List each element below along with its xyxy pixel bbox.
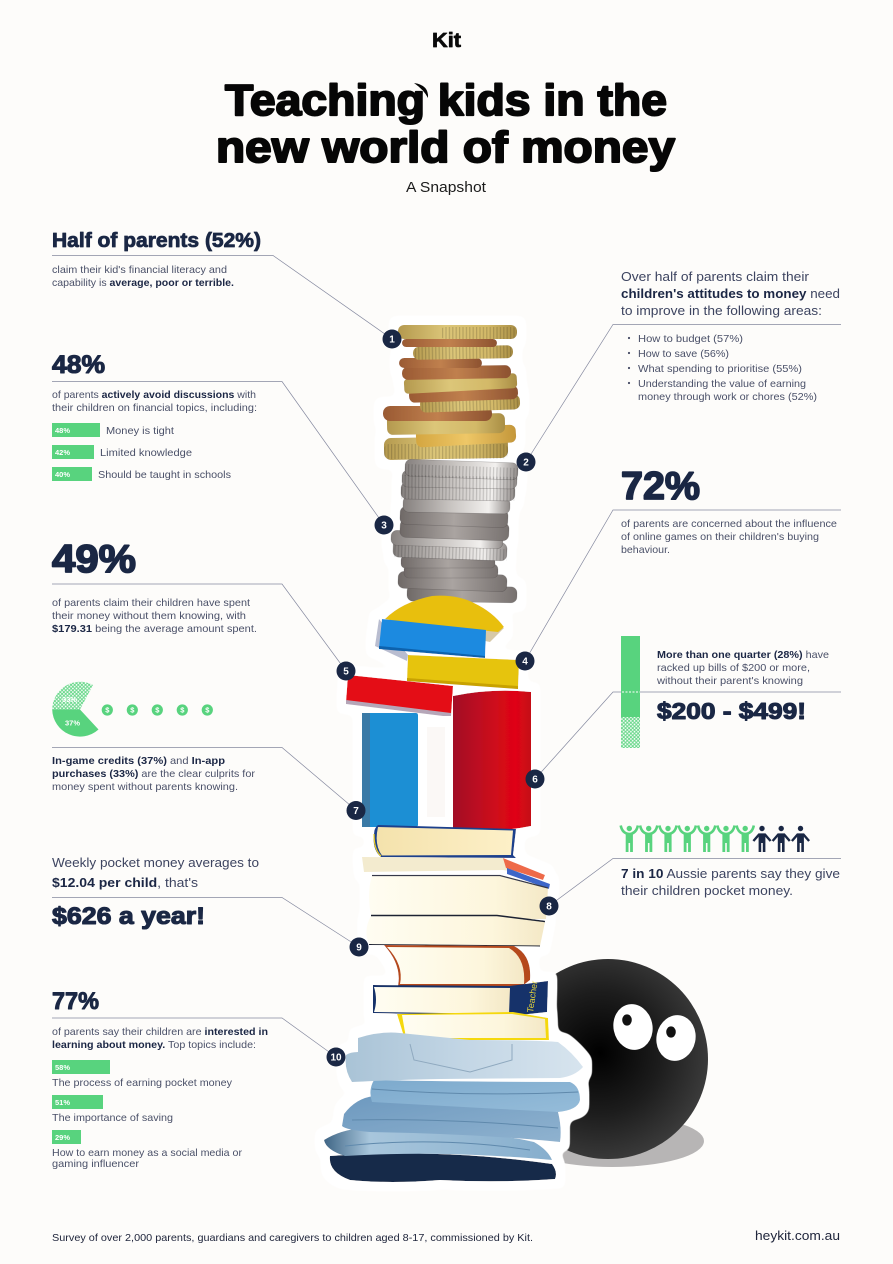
numbered markers: 7 xyxy=(353,806,359,817)
text block: capability is average, poor or terrible. xyxy=(52,277,234,289)
pie chart: in-game credits and in-app purchases: 37% xyxy=(65,718,80,728)
leader line 9 xyxy=(52,898,359,947)
panel: 48 percent avoid discussions xyxy=(52,351,384,525)
text block: racked up bills of $200 or more, xyxy=(657,662,810,674)
panel: culprits xyxy=(52,748,357,811)
bar chart: reasons: Should be taught in schools xyxy=(98,469,231,481)
panel: 49 percent spent without knowing xyxy=(52,538,346,671)
leader line 4 xyxy=(525,510,841,661)
stat: $626 a year: $626 a year! xyxy=(52,903,205,930)
text block xyxy=(52,597,257,635)
text block: their children on financial topics, including: xyxy=(52,402,257,414)
text block: without their parent's knowing xyxy=(656,675,803,687)
text block xyxy=(621,269,840,318)
text block: of parents claim their children have spent xyxy=(52,597,250,609)
panel: attitudes to money xyxy=(526,269,841,462)
bar chart: topics: 29% xyxy=(55,1133,70,1142)
text block: purchases (33%) are the clear culprits for xyxy=(52,768,256,780)
silver coin stack xyxy=(391,459,518,603)
bullet list: How to save (56%) xyxy=(638,348,729,360)
text block: of online games on their children's buying xyxy=(621,531,819,543)
bullet list: Understanding the value of earning xyxy=(638,378,806,390)
footer: website: heykit.com.au xyxy=(755,1228,840,1243)
text block: to improve in the following areas: xyxy=(621,303,822,318)
leader line 8 xyxy=(549,858,841,906)
text block: More than one quarter (28%) have xyxy=(657,649,829,661)
numbered markers: 6 xyxy=(532,774,538,786)
text block: $12.04 per child , that's xyxy=(52,875,199,890)
text block xyxy=(621,518,837,556)
bullet list: What spending to prioritise (55%) xyxy=(638,363,802,375)
pie chart: in-game credits and in-app purchases: 33% xyxy=(62,695,77,704)
numbered markers: 5 xyxy=(343,666,349,678)
panel: bills of $200 or more xyxy=(535,636,841,779)
text block: their money without them knowing, with xyxy=(52,610,246,622)
numbered markers: 10 xyxy=(330,1052,342,1064)
text block: children's attitudes to money need xyxy=(621,286,840,301)
text block: Weekly pocket money averages to xyxy=(52,855,259,870)
stat: 48%: 48% xyxy=(52,351,105,379)
panel: weekly pocket money xyxy=(52,855,359,947)
leader line 6 xyxy=(535,692,841,779)
bar chart: reasons: Limited knowledge xyxy=(100,447,192,459)
bar chart: topics: 51% xyxy=(55,1098,70,1107)
bar chart: topics: The importance of saving xyxy=(52,1112,173,1124)
stat: 72%: 72% xyxy=(621,465,700,508)
icons: dollar coins xyxy=(102,704,213,716)
bar chart: reasons: Money is tight xyxy=(106,425,174,437)
bar chart: reasons: 42% xyxy=(55,448,70,457)
leader line 10 xyxy=(52,1018,336,1057)
stat: 49%: 49% xyxy=(52,538,136,581)
panel: 72 percent online games xyxy=(525,465,841,661)
numbered markers xyxy=(326,330,558,1066)
heading: half of parents: Half of parents (52%) xyxy=(52,230,261,252)
text block: $179.31 being the average amount spent. xyxy=(52,623,257,635)
bar chart: topics xyxy=(52,1060,243,1170)
text block: 7 in 10 Aussie parents say they give xyxy=(621,866,840,881)
folded jeans xyxy=(324,1033,583,1182)
text block: their children pocket money. xyxy=(621,883,793,898)
illustration: stacked coins, blocks, books and jeans xyxy=(324,325,583,1182)
text block xyxy=(621,866,840,898)
bar chart: topics: The process of earning pocket money xyxy=(52,1077,233,1089)
text block: of parents say their children are interested in xyxy=(52,1026,268,1038)
illustration: character ball xyxy=(508,959,708,1167)
title xyxy=(216,76,676,172)
panel: 7 in 10 pocket money xyxy=(549,826,841,906)
text block: of parents actively avoid discussions with xyxy=(52,389,256,401)
leader line 7 xyxy=(52,748,357,811)
text block xyxy=(656,649,829,687)
text block xyxy=(52,755,256,793)
leader line 2 xyxy=(526,324,841,462)
icons: people xyxy=(621,826,809,852)
bullet list: How to budget (57%) xyxy=(638,333,743,345)
text block: money spent without parents knowing. xyxy=(52,781,238,793)
bar chart: reasons: 48% xyxy=(55,426,70,435)
text block: claim their kid's financial literacy and xyxy=(52,264,227,276)
gold and copper coin stack xyxy=(383,325,520,460)
bar chart: reasons xyxy=(52,423,231,481)
bar: 28 percent xyxy=(621,636,640,748)
numbered markers: 8 xyxy=(546,902,552,912)
title: new world of money xyxy=(216,123,676,172)
subtitle: A Snapshot xyxy=(406,179,487,196)
footer: survey note: Survey of over 2,000 parents, guardians and caregivers to children aged 8-17, commissioned by Kit. xyxy=(52,1232,533,1244)
bar chart: topics: gaming influencer xyxy=(52,1158,140,1170)
stat: $200 - $499: $200 - $499! xyxy=(657,698,806,724)
numbered markers: 3 xyxy=(381,520,387,532)
bullet list: money through work or chores (52%) xyxy=(638,391,817,403)
ridges on silver coins xyxy=(393,464,518,561)
numbered markers: 1 xyxy=(389,334,395,346)
panel: 77 percent interested xyxy=(52,988,336,1170)
pie chart: in-game credits and in-app purchases xyxy=(52,682,98,737)
text block xyxy=(52,1026,268,1051)
text block: In-game credits (37%) and In-app xyxy=(52,755,225,767)
text block: behaviour. xyxy=(621,544,670,556)
logo: Kit: Kit xyxy=(432,30,461,52)
book stack xyxy=(362,825,550,1040)
bar chart: topics: 58% xyxy=(55,1063,70,1072)
text block: Over half of parents claim their xyxy=(621,269,810,284)
text block xyxy=(52,389,257,414)
bar chart: reasons: 40% xyxy=(55,470,70,479)
bar chart: topics: How to earn money as a social media or xyxy=(52,1147,243,1159)
leader line 3 xyxy=(52,382,384,525)
text block: of parents are concerned about the influence xyxy=(621,518,837,530)
leader line 1 xyxy=(52,256,392,339)
text block xyxy=(52,855,259,890)
numbered markers: 2 xyxy=(523,458,529,468)
numbered markers: 9 xyxy=(356,942,362,954)
title: Teaching kids in the xyxy=(225,76,667,125)
book stack: Teacher xyxy=(525,980,539,1013)
stat: 77%: 77% xyxy=(52,988,99,1015)
panel: half of parents xyxy=(52,230,392,339)
toy blocks xyxy=(346,596,531,831)
text block: learning about money. Top topics include: xyxy=(52,1039,256,1051)
bullet list xyxy=(628,333,817,403)
leader line 5 xyxy=(52,584,346,671)
numbered markers: 4 xyxy=(522,656,528,668)
text block xyxy=(52,264,234,289)
